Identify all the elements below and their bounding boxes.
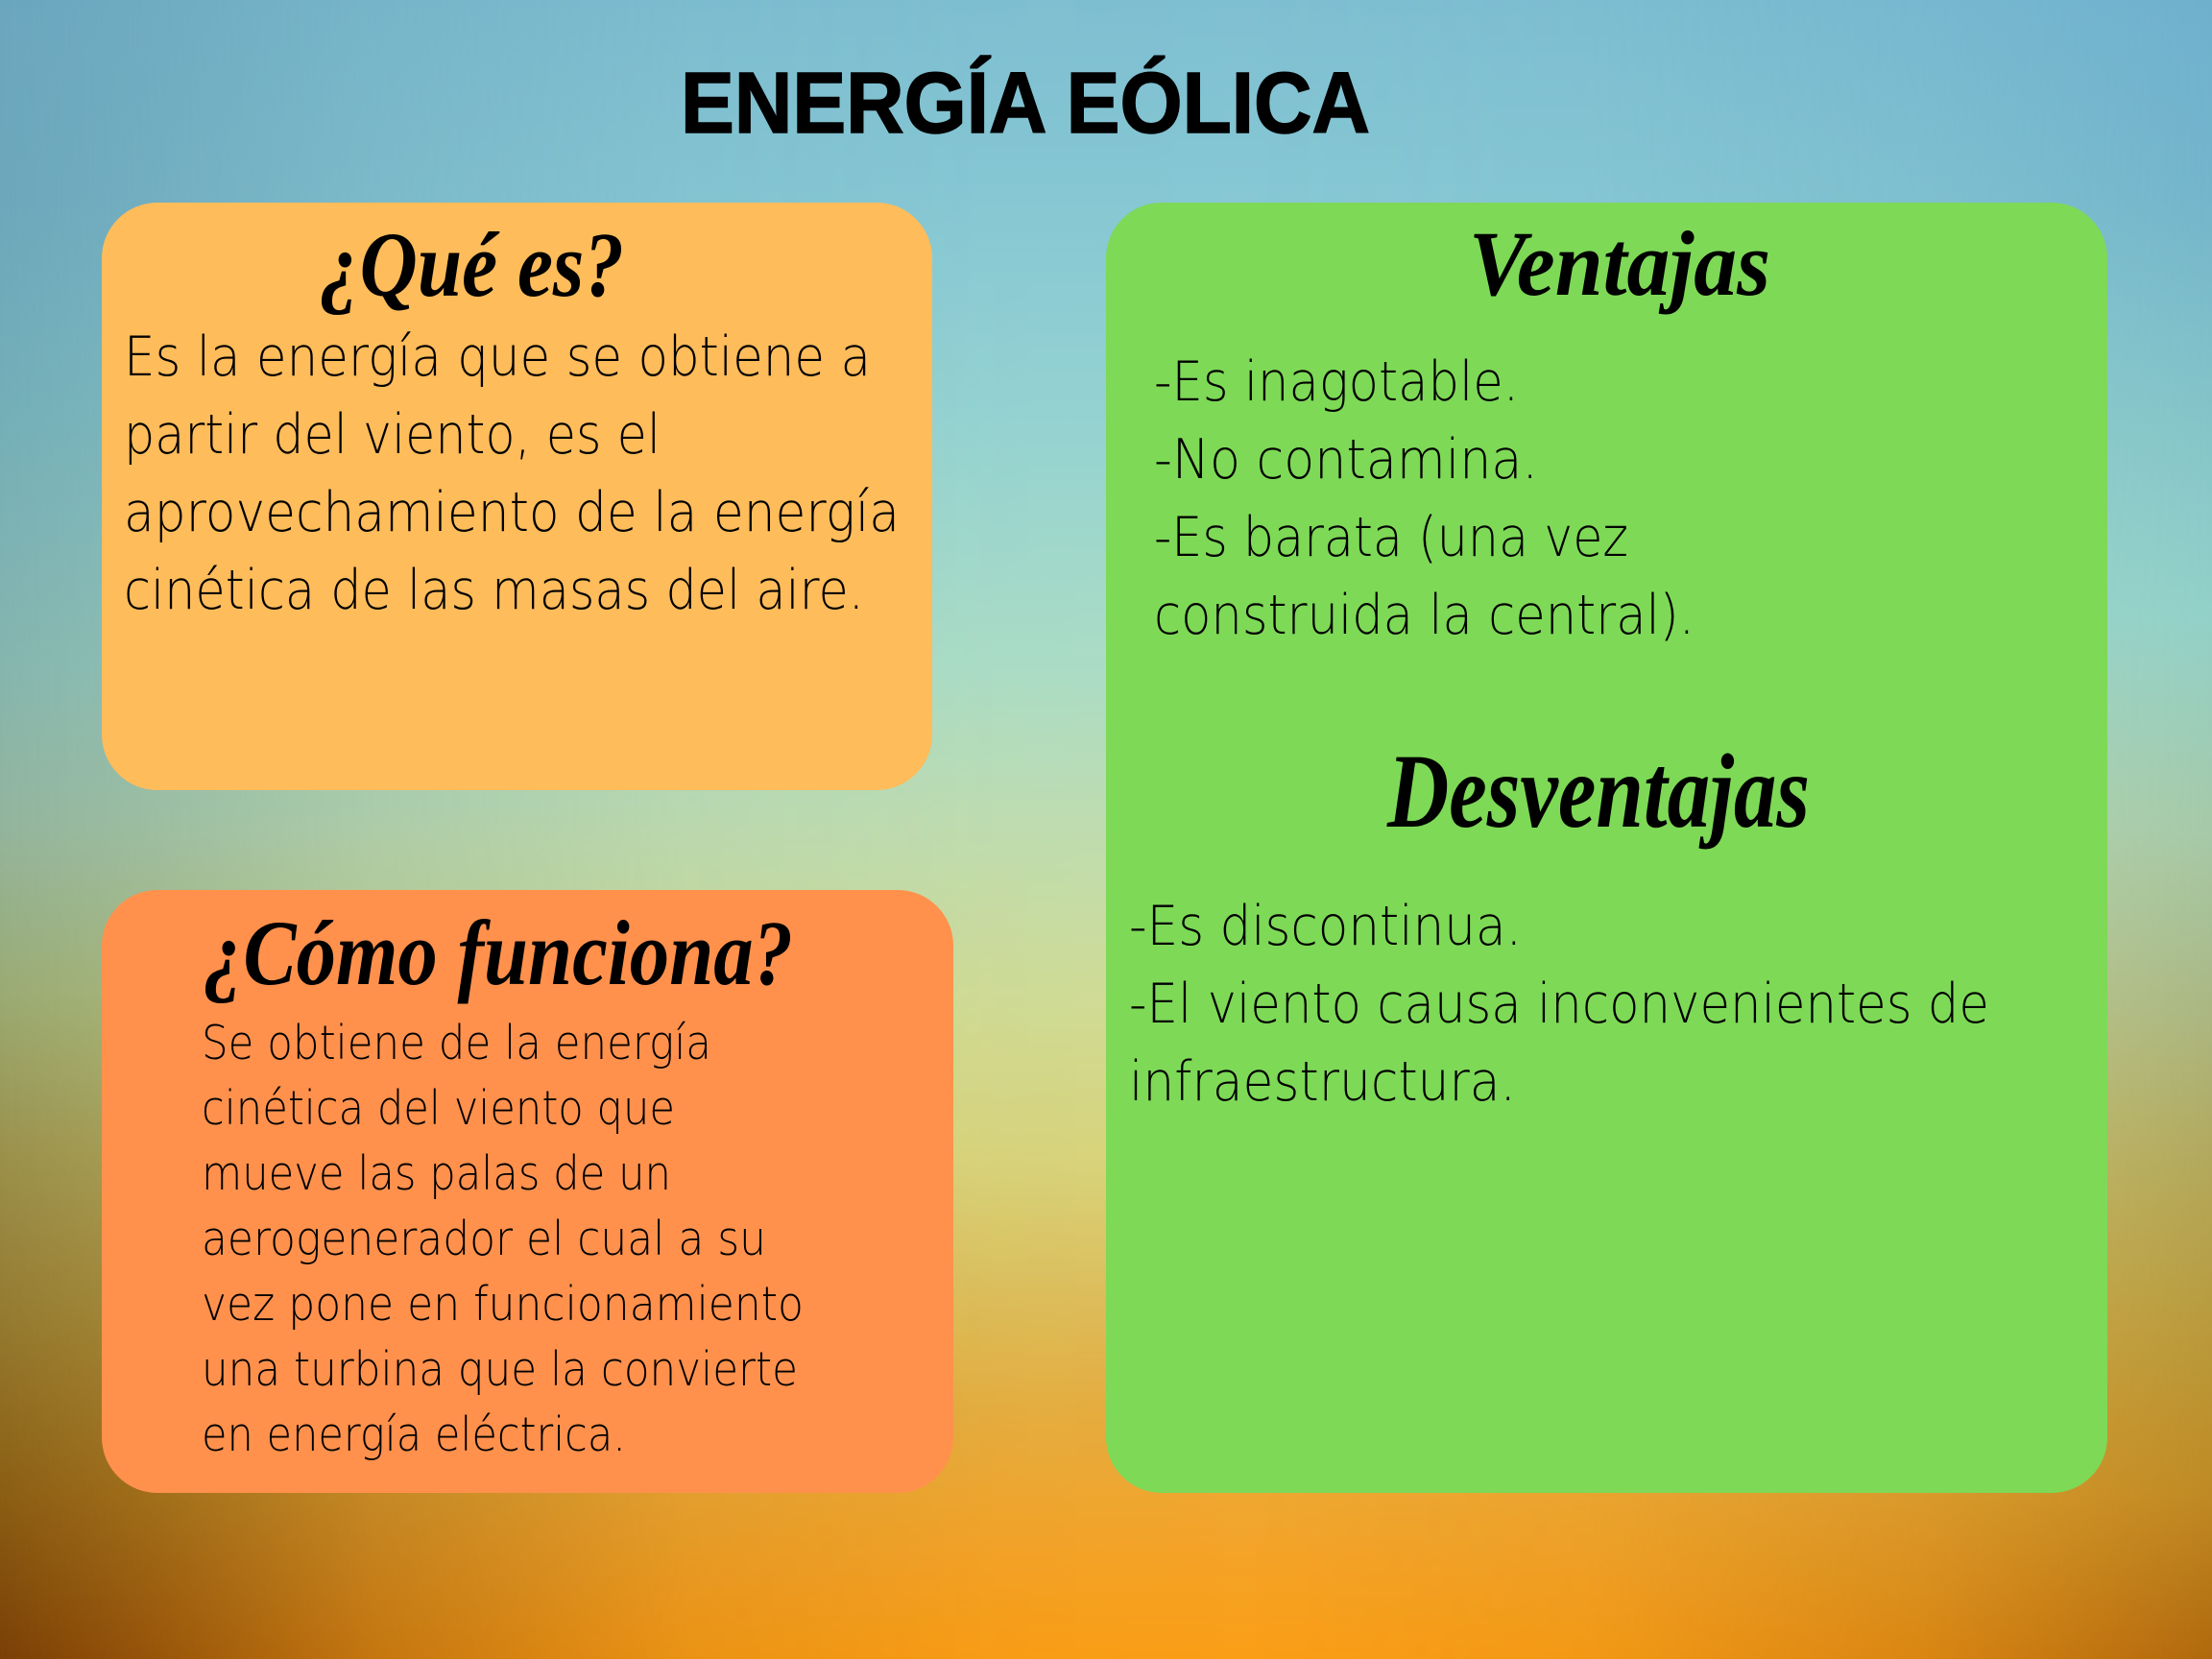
text block: explanation: mueve las palas de un bbox=[202, 1146, 671, 1201]
text block: desventajas list bbox=[1129, 895, 1989, 1114]
text block: definition: Es la energía que se obtiene a bbox=[124, 325, 871, 389]
text block: definition: cinética de las masas del aire. bbox=[124, 559, 864, 622]
text block: definition: partir del viento, es el bbox=[124, 403, 661, 467]
text block: ventajas list bbox=[1154, 350, 1695, 647]
text block: definition bbox=[124, 325, 900, 622]
text block: desventajas list: -El viento causa inconvenientes de bbox=[1129, 973, 1989, 1036]
text block: explanation: en energía eléctrica. bbox=[202, 1407, 626, 1462]
text block: ventajas list: -No contamina. bbox=[1154, 428, 1538, 492]
text block: ventajas list: -Es barata (una vez bbox=[1154, 506, 1628, 569]
text block: definition: aprovechamiento de la energía bbox=[124, 481, 900, 544]
text block: explanation: aerogenerador el cual a su bbox=[202, 1212, 766, 1266]
text block: explanation: una turbina que la convierte bbox=[202, 1342, 798, 1397]
title: ENERGÍA EÓLICA bbox=[681, 55, 1370, 152]
text block: ventajas list: -Es inagotable. bbox=[1154, 350, 1519, 414]
heading: Desventajas: Desventajas bbox=[1386, 733, 1810, 850]
panel: ventajas y desventajas bbox=[1106, 203, 2107, 1493]
text block: explanation: Se obtiene de la energía bbox=[202, 1016, 711, 1070]
heading: ¿Cómo funciona?: ¿Cómo funciona? bbox=[204, 902, 793, 1004]
panel: ¿Cómo funciona? bbox=[102, 890, 953, 1493]
text block: explanation: vez pone en funcionamiento bbox=[202, 1277, 804, 1332]
text block: desventajas list: -Es discontinua. bbox=[1129, 895, 1522, 958]
heading: ¿Qué es?: ¿Qué es? bbox=[320, 213, 624, 316]
panel: ¿Qué es? bbox=[102, 203, 932, 790]
text block: ventajas list: construida la central). bbox=[1154, 584, 1695, 647]
text block: explanation bbox=[202, 1016, 804, 1462]
text block: explanation: cinética del viento que bbox=[202, 1081, 675, 1136]
text block: desventajas list: infraestructura. bbox=[1129, 1050, 1516, 1114]
heading: Ventajas: Ventajas bbox=[1469, 212, 1770, 315]
